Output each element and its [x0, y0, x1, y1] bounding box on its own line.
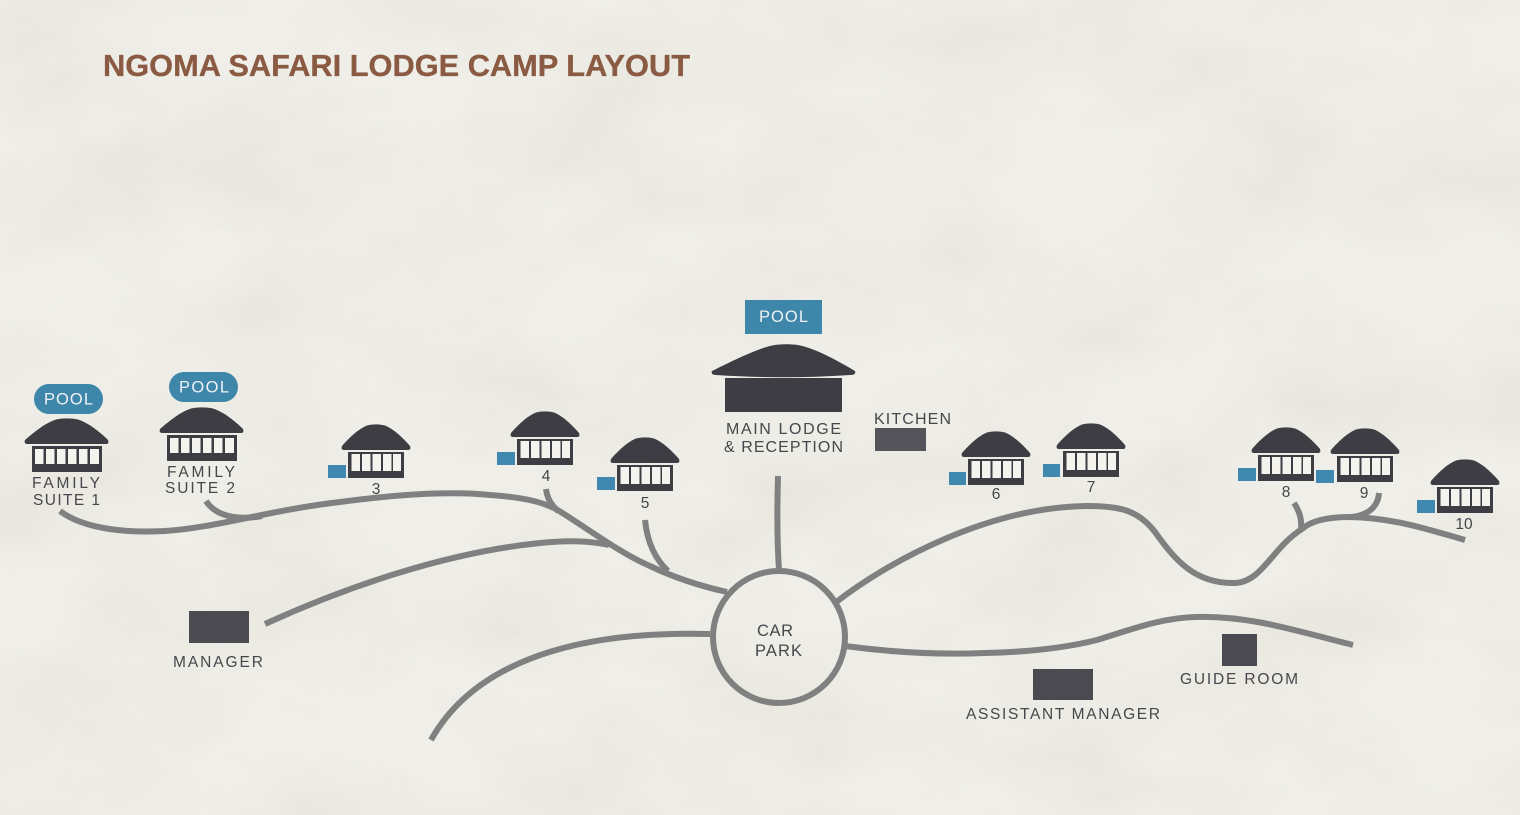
assistant manager: [966, 669, 1160, 723]
title: NGOMA SAFARI LODGE CAMP LAYOUT: [103, 48, 690, 83]
icon: main lodge: [712, 344, 855, 412]
path: lower west road: [431, 634, 710, 740]
cabin 7: [1043, 423, 1125, 496]
cabin 4: [497, 411, 579, 485]
label: car park: CAR: [757, 622, 793, 640]
cabin 5: 5: [641, 495, 649, 512]
cabin 8: 8: [1282, 484, 1290, 501]
guide room: [1180, 634, 1298, 688]
icon: family suite 2 hut: [160, 407, 243, 461]
cabin 6: 6: [992, 486, 1000, 503]
label: main lodge and reception: MAIN LODGE: [726, 421, 841, 438]
cabin 9: [1316, 428, 1399, 502]
path: cabin 9 branch: [1352, 493, 1379, 517]
label: car park: [755, 622, 802, 660]
kitchen: KITCHEN: [874, 411, 951, 428]
pool: main lodge: [745, 300, 822, 334]
pool: main lodge: POOL: [759, 308, 808, 326]
label: family suite 2: SUITE 2: [165, 480, 235, 497]
car park circle: [713, 571, 845, 703]
label: main lodge and reception: [724, 421, 843, 456]
cabin 4: 4: [542, 468, 551, 485]
cabin 10: 10: [1455, 516, 1473, 533]
path network: [60, 476, 1465, 740]
path: manager road: [265, 541, 609, 624]
manager: MANAGER: [173, 654, 263, 671]
label: car park: PARK: [755, 642, 802, 660]
path: family suite 2 branch: [206, 501, 262, 518]
icon: family suite 1 hut: [25, 418, 108, 472]
pool: family suite 1: [34, 384, 103, 414]
pool: family suite 2: POOL: [179, 378, 229, 396]
path: cabin 8 branch: [1294, 503, 1301, 530]
assistant manager: ASSISTANT MANAGER: [966, 706, 1160, 723]
cabin 10: [1417, 459, 1499, 533]
cabin 6: [949, 431, 1030, 503]
manager: [173, 611, 263, 671]
label: family suite 1: FAMILY: [32, 475, 100, 492]
pool: family suite 2: [169, 372, 238, 402]
path: cabin 4 branch: [546, 489, 558, 511]
label: family suite 2: FAMILY: [167, 464, 235, 481]
guide room: GUIDE ROOM: [1180, 671, 1298, 688]
label: family suite 2: [165, 464, 235, 497]
cabin 5: [597, 437, 679, 512]
pool: family suite 1: POOL: [44, 390, 93, 408]
path: car park to cabins 6 to 10: [835, 506, 1465, 603]
path: family suite 1 to main road: [60, 493, 727, 592]
label: family suite 1: [32, 475, 100, 509]
cabin 8: [1238, 427, 1320, 501]
path: lower east road: [845, 617, 1353, 654]
label: main lodge and reception: & RECEPTION: [724, 439, 843, 456]
label: family suite 1: SUITE 1: [33, 492, 100, 509]
cabin 3: [328, 424, 410, 498]
path: cabin 5 branch: [645, 520, 668, 571]
cabin 9: 9: [1360, 485, 1368, 502]
kitchen: [874, 411, 951, 451]
path: main lodge road: [777, 476, 779, 570]
cabin 3: 3: [372, 481, 380, 498]
cabin 7: 7: [1087, 479, 1095, 496]
